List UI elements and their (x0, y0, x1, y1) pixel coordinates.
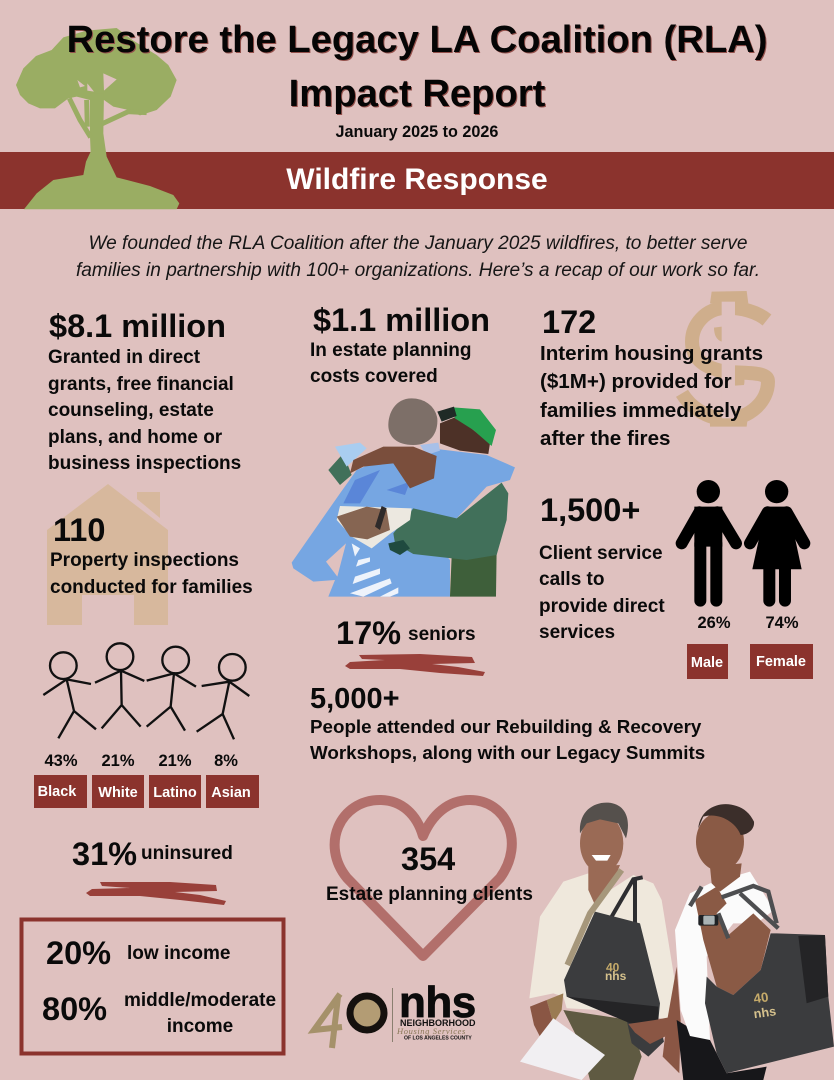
logo: NHS 40 years: nhs (399, 978, 476, 1027)
label: female (750, 644, 813, 679)
stat: 110 property inspections (50, 512, 253, 598)
label: asian (206, 775, 259, 808)
ethnicity percentages (44, 752, 238, 770)
ethnicity percentages: 43% (44, 752, 78, 770)
photo: two women with tote bags: 40 (753, 989, 769, 1006)
ethnicity percentages: 21% (101, 752, 135, 770)
stat: 17% seniors: 17% (336, 615, 401, 651)
icon: house (47, 484, 168, 625)
banner heading: Wildfire Response (286, 163, 548, 196)
banner: wildfire response (0, 152, 834, 209)
icon: male and female figures (682, 480, 804, 601)
stat: 1.1 million estate planning: costs covered (310, 366, 438, 387)
income panel: low income (127, 943, 230, 964)
stat: 1,500+ client service calls (539, 492, 665, 643)
logo: NHS 40 years: NEIGHBORHOOD (400, 1018, 476, 1028)
stat: 8.1 million granted: $8.1 million (49, 308, 226, 344)
brush underline: seniors (345, 654, 485, 676)
stat: 172 interim housing grants: families immediately (540, 399, 742, 422)
icon: green tree (16, 28, 179, 209)
gender percentages: 74% (765, 614, 799, 632)
label: male: Male (691, 655, 723, 671)
ethnicity percentages: 21% (158, 752, 192, 770)
stat: 110 property inspections: 110 (53, 512, 105, 548)
label: latino (149, 775, 201, 808)
icon: dollar sign (682, 291, 768, 427)
stat: 5,000+ people attended: Workshops, along with our Legacy Summits (310, 742, 705, 763)
stat: 1.1 million estate planning (310, 302, 490, 387)
photo: two women with tote bags: 40 (606, 961, 620, 975)
stat: 172 interim housing grants (540, 304, 763, 450)
label: latino: Latino (153, 785, 197, 801)
stat: 8.1 million granted: grants, free financial (48, 374, 234, 395)
label: black (34, 775, 87, 808)
icon: heart outline (335, 800, 512, 956)
intro text: families in partnership with 100+ organizations. Here’s a recap of our work so far. (76, 260, 760, 281)
title (67, 18, 767, 115)
gender percentages: 26% (697, 614, 731, 632)
label: white: White (98, 785, 138, 801)
label: black: Black (38, 784, 77, 800)
stat: 1,500+ client service calls: calls to (539, 569, 604, 590)
label: white (92, 775, 144, 808)
stat: 1,500+ client service calls: 1,500+ (540, 492, 640, 528)
stat: 17% seniors (336, 615, 476, 651)
stat: 31% uninsured: 31% (72, 836, 137, 872)
intro text (76, 233, 760, 281)
stat: 110 property inspections: Property inspections (50, 550, 239, 571)
title: Impact Report (289, 72, 546, 115)
income panel (22, 920, 284, 1054)
stat: 354 estate planning clients (326, 841, 533, 905)
intro text: We founded the RLA Coalition after the January 2025 wildfires, to better serve (88, 233, 748, 254)
income panel: income (167, 1016, 233, 1037)
stat: 8.1 million granted: plans, and home or (48, 427, 223, 448)
photo: two women with tote bags: nhs (753, 1004, 777, 1021)
stat: 172 interim housing grants: 172 (542, 304, 596, 340)
stat: 31% uninsured (72, 836, 233, 872)
stat: 1,500+ client service calls: services (539, 622, 615, 643)
stat: 354 estate planning clients: 354 (401, 841, 455, 877)
gender percentages (697, 614, 799, 632)
brush underline: uninsured (86, 882, 226, 905)
label: male (687, 644, 728, 679)
stat: 1,500+ client service calls: Client service (539, 543, 663, 564)
photo: two women with tote bags (520, 803, 834, 1080)
stat: 354 estate planning clients: Estate planning clients (326, 884, 533, 905)
photo: two men hugging (292, 398, 515, 597)
logo: NHS 40 years: Housing Services (396, 1026, 466, 1036)
ethnicity percentages: 8% (214, 752, 238, 770)
stat: 110 property inspections: conducted for families (50, 577, 253, 598)
income panel: middle/moderate (124, 990, 276, 1011)
stat: 172 interim housing grants: Interim housing grants (540, 342, 763, 365)
stat: 31% uninsured: uninsured (141, 843, 233, 864)
logo: NHS 40 years: OF LOS ANGELES COUNTY (404, 1036, 472, 1042)
stat: 8.1 million granted (48, 308, 241, 474)
stat: 1.1 million estate planning: In estate planning (310, 340, 472, 361)
stat: 5,000+ people attended: 5,000+ (310, 683, 400, 715)
income panel: 80% (42, 991, 107, 1027)
label: asian: Asian (211, 785, 251, 801)
date range: January 2025 to 2026 (336, 123, 498, 141)
income panel: 20% (46, 935, 111, 971)
photo: two women with tote bags: nhs (605, 969, 627, 983)
stat: 172 interim housing grants: after the fires (540, 427, 670, 450)
stat: 172 interim housing grants: ($1M+) provided for (540, 370, 732, 393)
stat: 1,500+ client service calls: provide direct (539, 596, 665, 617)
icon: stick figures (43, 643, 249, 739)
stat: 1.1 million estate planning: $1.1 million (313, 302, 490, 338)
logo: NHS 40 years (314, 978, 476, 1048)
stat: 17% seniors: seniors (408, 624, 476, 645)
stat: 8.1 million granted: Granted in direct (48, 347, 201, 368)
stat: 8.1 million granted: business inspections (48, 453, 241, 474)
stat: 8.1 million granted: counseling, estate (48, 400, 214, 421)
label: female: Female (756, 654, 806, 670)
stat: 5,000+ people attended (310, 683, 705, 763)
title: Restore the Legacy LA Coalition (RLA) (67, 18, 767, 61)
stat: 5,000+ people attended: People attended our Rebuilding & Recovery (310, 716, 702, 737)
